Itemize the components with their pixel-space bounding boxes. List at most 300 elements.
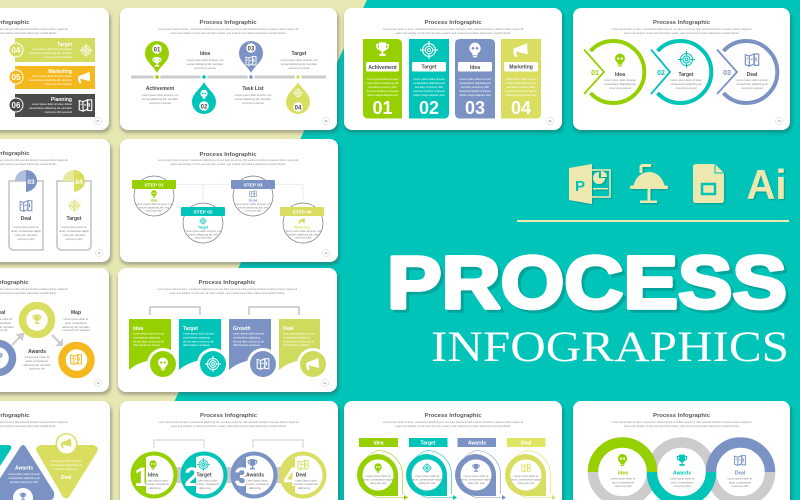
circle 3 awards: sit amet, consetetuer	[245, 482, 269, 486]
card: growth	[229, 319, 279, 380]
ring: deal: Lorem ipsum dolor sit	[728, 476, 753, 480]
card: idea: elit sed diam nonummy nib	[133, 340, 164, 344]
circle 4 deal: Deal	[296, 472, 307, 478]
step 01: Lorem ipsum dolor sit amet, con	[136, 202, 173, 206]
tag 03 deal: Deal	[21, 216, 32, 222]
step 01: nonummy nibh	[145, 208, 163, 212]
circle 2 target: 2	[184, 462, 200, 492]
ring: awards: amet, consectetuer	[671, 480, 693, 484]
label: map: Lorem ipsum dolor sit	[64, 317, 89, 321]
label: awards: nonummy nib.	[29, 366, 45, 370]
triangle: deal: Deal	[61, 475, 72, 481]
step 02: nonummy nibh	[194, 236, 212, 240]
heading: Process Infographic	[424, 20, 482, 26]
circle 03 deal	[717, 41, 777, 103]
circle 02 target: nonummy Loremet	[675, 86, 697, 90]
subtitle: Lorem ipsum dolor sit amet, consectetur adipiscing elit, sed diam nonummy nibh euismod tincidunt ut laoreet dolore magna ali	[158, 421, 299, 424]
tag 04 target	[57, 170, 91, 250]
ring: deal	[711, 442, 770, 500]
bar: marketing 05: consectetuer adipiscing elit, sed diam	[29, 78, 72, 82]
subtitle: Lorem ipsum dolor sit amet, consectetur adipiscing elit, sed diam nonummy nibh euismod tincidunt ut laoreet dolore magna ali	[383, 28, 523, 31]
subtitle	[0, 159, 68, 166]
triangle: awards: Awards	[15, 466, 33, 472]
triangle: deal	[36, 433, 98, 498]
label: task list: nonummy Loremet	[242, 101, 264, 105]
label: achivement: Achivement	[146, 86, 175, 92]
teardrop: deal: Deal	[521, 440, 532, 446]
ring: idea: amet, consectetuer	[612, 480, 634, 484]
teardrop: target: cising elit, sed	[419, 481, 436, 485]
card 04 marketing: 04	[511, 98, 531, 118]
card: target: nibh tincidunt ut laoreet	[183, 343, 210, 347]
icon: powerpoint	[569, 164, 610, 204]
circle 2 target: adipiscing	[199, 486, 211, 490]
page number: 09	[549, 120, 552, 123]
label: target	[281, 51, 318, 70]
step 02: Lorem ipsum dolor sit amet, con	[185, 229, 222, 233]
subtitle: quam erat volutpat. Ut wisi enim ad minim veniam, quis nostrud exerci tation ullamcorper suscipit lobortis	[624, 32, 740, 35]
slide 08: timeline pins	[120, 8, 339, 133]
label: idea	[187, 51, 224, 70]
ring: deal: nonummy nibh	[731, 484, 749, 488]
page number: 08	[325, 120, 328, 123]
icon: google slides	[693, 164, 724, 203]
circle 02 target: consectetuer adipiscing elit	[670, 82, 702, 86]
subtitle: quam erat volutpat. Ut wisi enim ad minim veniam, quis nostrud exerci tation ullamcorper suscipit lobortis	[170, 32, 286, 35]
teardrop: awards: Awards	[468, 440, 486, 446]
bar: planning 06: nonummy nibh euismod	[44, 110, 73, 114]
label: task list: Lorem ipsum dolor sit amet, con	[235, 93, 272, 97]
circle 03 deal: nonummy Loremet	[741, 86, 763, 90]
step 04: Lorem ipsum dolor sit amet, con	[285, 229, 322, 233]
label: map	[62, 310, 90, 332]
tag 03 deal: cising elit, sed diam	[15, 233, 37, 237]
subtitle: Lorem ipsum dolor sit amet, consectetur adipiscing elit, sed diam nonummy nibh euismod tincidunt ut laoreet dolore magna ali	[612, 421, 752, 424]
label: map: adipiscing elit, sed diam	[62, 325, 90, 329]
ring: idea: nonummy nibh	[614, 484, 632, 488]
tag 03 deal: Lorem ipsum dolor sit	[14, 225, 39, 229]
step 01: secuer adipiscing elit, sed	[139, 206, 169, 210]
step 03: Grow	[249, 198, 258, 202]
label: achivement	[142, 86, 179, 105]
label: task list: Task List	[242, 86, 264, 92]
circle 3 awards: 3	[234, 462, 250, 492]
card 04 marketing	[501, 39, 541, 118]
circle 1 idea: Lorem ipsum dolor	[146, 478, 168, 482]
card 02 target: Target	[422, 64, 437, 70]
card 03 idea: Idea	[470, 65, 480, 71]
tag 03 deal: nonummy nibh	[17, 237, 35, 241]
step 03: Lorem ipsum dolor sit amet, con	[235, 202, 272, 206]
page number: 14	[325, 252, 328, 255]
slide: numbered circles	[120, 401, 340, 500]
bar: target 04: consectetuer adipiscing elit, sed diam	[29, 51, 72, 55]
card: growth: Lorem ipsum dolor sit amet	[233, 332, 265, 336]
subtitle: quam erat volutpat. Ut wisi enim ad minim veniam, quis nostrud exerci tation ullamcorper suscipit lobortis	[624, 425, 740, 428]
card 01 achivement: consectetuer adipiscing elit	[367, 81, 398, 85]
page number: 19	[97, 382, 100, 385]
subtitle: quam erat volutpat. Ut wisi enim ad minim veniam, quis nostrud exerci tation ullamcorper suscipit lobortis	[170, 163, 286, 166]
label: awards	[23, 349, 51, 370]
slide 09: four cards	[344, 8, 564, 133]
pin 01: 01	[154, 48, 161, 54]
step 03: nonummy nibh	[244, 208, 262, 212]
circle 02 target: 02	[657, 70, 665, 77]
step 02: secuer adipiscing elit, sed	[188, 232, 218, 236]
heading: Process Infographic	[200, 152, 257, 158]
tag 03 deal: 03	[27, 179, 35, 186]
card: growth: elit sed diam nonummy nib	[233, 340, 264, 344]
ring: awards: Awards	[673, 470, 691, 476]
teardrop: target: Target	[421, 440, 436, 446]
card: deal: nibh tincidunt ut laoreet	[283, 343, 310, 347]
triangle: awards: Lorem ipsum dolor sit amet	[8, 472, 40, 476]
card 04 marketing: euismod tincidunt ut laoreet	[505, 89, 537, 93]
step 03: secuer adipiscing elit, sed	[238, 206, 268, 210]
teardrop: target: Lorem ipsum dolor sit	[415, 474, 440, 478]
heading: Process Infographic	[200, 20, 257, 26]
ring: blue	[0, 344, 12, 372]
circle 4 deal: sit amet, consetetuer	[294, 482, 318, 486]
teardrop: awards	[455, 438, 506, 500]
triangle: teal	[0, 445, 11, 466]
card 01 achivement: 01	[372, 98, 393, 118]
page number: 12	[98, 252, 101, 255]
subtitle: quam erat volutpat. Ut wisi enim ad minim veniam, quis nostrud exerci tation ullamcorper suscipit lobortis	[396, 425, 511, 428]
heading: Process Infographic	[424, 413, 482, 419]
teardrop: deal: cising elit, sed	[518, 481, 535, 485]
card 04 marketing: dolore magna aliquam erat	[506, 93, 537, 97]
card: growth: consectetuer adipiscing	[233, 336, 261, 340]
subtitle: quam erat volutpat. Ut wisi enim ad minim veniam, quis nostrud exerci tation ullamcorper suscipit lobortis	[170, 292, 285, 295]
teardrop: idea: Lorem ipsum dolor sit	[366, 474, 391, 478]
divider	[517, 220, 789, 222]
ring: awards: Lorem ipsum dolor sit	[670, 476, 695, 480]
circle 4 deal: Lorem ipsum dolor	[295, 478, 317, 482]
brackets	[150, 307, 299, 315]
ring: trophy	[22, 306, 52, 334]
card: growth: Growth	[233, 326, 250, 332]
circle 1 idea: adipiscing	[149, 486, 161, 490]
heading: Process Infographic	[198, 280, 256, 286]
bar: planning 06	[9, 94, 95, 117]
card 02 target: euismod tincidunt ut laoreet	[413, 89, 445, 93]
step 04: secuer adipiscing elit, sed	[288, 232, 318, 236]
card: deal: elit sed diam nonummy nib	[283, 340, 314, 344]
label: achivement: nonummy Loremet	[149, 101, 171, 105]
bar: planning 06: Planning	[51, 97, 72, 103]
subtitle	[383, 421, 523, 428]
icon: powerpoint: P	[575, 178, 585, 195]
slide: triangles (cropped)	[0, 401, 112, 500]
slide 13: paper tags (cropped)	[0, 139, 112, 265]
step 01: STEP 01	[144, 182, 164, 188]
circle 3 awards: adipiscing	[249, 486, 261, 490]
label: achivement: Lorem ipsum dolor sit amet, con	[142, 93, 179, 97]
label: map: nonummy nib. euismod	[63, 328, 90, 332]
page number: 07	[97, 120, 100, 123]
slide 10: chevron circles	[573, 8, 792, 133]
page number	[776, 118, 782, 124]
bar: planning 06: Lorem ipsum dolor sit amet, dolore	[32, 102, 73, 106]
circle 01 idea: 01	[591, 70, 599, 77]
teardrop: deal: amet, consectetuer adipis	[511, 478, 541, 482]
label: achivement: secuer adipiscing elit, sed diam	[142, 97, 178, 101]
card 04 marketing: sed diam nonummy nibh	[507, 85, 536, 89]
brackets	[154, 440, 303, 448]
card 01 achivement: Lorem ipsum dolor sit amet	[367, 77, 398, 81]
circle 03 deal: consectetuer adipiscing elit	[736, 82, 768, 86]
timeline line	[131, 76, 326, 78]
step 04: nonummy nibh	[294, 236, 312, 240]
label: idea: Lorem ipsum dolor sit amet, con	[187, 58, 224, 62]
subtitle: Lorem ipsum dolor sit amet, consectetur adipiscing elit, sed diam nonummy nibh euismod tincidunt ut laoreet dolore magna ali	[157, 288, 297, 291]
tag 04 target: Lorem ipsum dolor sit	[62, 225, 87, 229]
bar: target 04: 04	[12, 46, 21, 55]
circle 1 idea: 1	[134, 462, 150, 492]
label: target: Target	[292, 51, 307, 57]
bar: marketing 05	[9, 66, 95, 89]
card: target: consectetuer adipiscing	[183, 336, 211, 340]
teardrop: awards: Lorem ipsum dolor sit	[464, 474, 489, 478]
pin 04: 04	[295, 106, 302, 112]
circle 2 target: sit amet, consetetuer	[195, 482, 219, 486]
triangle: deal: sed diam nonummy	[55, 467, 78, 471]
subtitle	[383, 28, 523, 35]
step 03	[231, 176, 275, 216]
ring: deal: amet, consectetuer	[729, 480, 751, 484]
teardrop: idea	[357, 438, 408, 500]
card: target: Target	[183, 326, 198, 332]
circle 3 awards	[230, 452, 278, 498]
triangle: deal: consectetuer adipiscing elit	[50, 463, 82, 467]
step 01	[132, 176, 176, 216]
circle 4 deal	[280, 452, 326, 498]
subtitle	[158, 28, 298, 35]
label: awards: Lorem ipsum dolor sit	[25, 355, 50, 359]
triangle: awards: sed diam nonummy nibh	[10, 480, 39, 484]
card: deal: Lorem ipsum dolor sit amet	[283, 332, 315, 336]
step 02	[181, 203, 225, 243]
circle 1 idea: sit amet, consetetuer	[145, 482, 169, 486]
page number: 20	[324, 382, 327, 385]
pin 01	[145, 41, 169, 73]
triangle: awards	[0, 445, 54, 500]
card 01 achivement: euismod tincidunt ut laoreet	[367, 89, 399, 93]
connectors	[176, 184, 303, 200]
page number: 10	[778, 120, 781, 123]
ring: idea: Lorem ipsum dolor sit	[611, 476, 636, 480]
teardrop: awards: amet, consectetuer adipis	[461, 478, 491, 482]
label: idea: nonummy Loremet	[194, 66, 216, 70]
bar: marketing 05: 05	[12, 73, 21, 82]
icon: illustrator: Ai	[746, 161, 786, 208]
bar: marketing 05: Marketing	[48, 69, 72, 75]
card 03 idea: consectetuer adipiscing elit	[459, 81, 491, 85]
card 02 target: sed diam nonummy nibh	[415, 85, 444, 89]
pin 04	[286, 82, 310, 114]
card: target	[179, 319, 229, 380]
circle 01 idea: Lorem ipsum dolor sit amet	[604, 78, 636, 82]
circle 01 idea: consectetuer adipiscing elit	[604, 82, 636, 86]
circle 01 idea	[584, 41, 644, 103]
label: deal	[0, 310, 14, 332]
tag 04 target: Target	[67, 216, 82, 222]
bar: target 04: Target	[57, 42, 72, 48]
label: map: Map	[71, 310, 81, 316]
page number	[94, 118, 102, 124]
slide 07: stacked bars (cropped)	[0, 8, 111, 133]
card: idea: consectetuer adipiscing	[133, 336, 161, 340]
teardrop: idea: cising elit, sed	[370, 481, 387, 485]
ring: deal: Deal	[735, 470, 746, 476]
subtitle: Lorem ipsum dolor sit amet, consectetur adipiscing elit, sed diam nonummy nibh euismod tincidunt ut laoreet dolore magna ali	[158, 28, 298, 31]
software icons	[569, 161, 786, 208]
circle 03 deal: 03	[723, 70, 731, 77]
card: deal	[279, 319, 329, 380]
card 01 achivement: sed diam nonummy nibh	[368, 85, 397, 89]
subtitle	[612, 421, 752, 428]
circle 2 target: Lorem ipsum dolor	[196, 478, 218, 482]
teardrop: deal	[505, 438, 556, 500]
card: deal: consectetuer adipiscing	[283, 336, 311, 340]
label: awards: amet, consectetuer	[26, 359, 48, 363]
card 02 target: 02	[419, 98, 439, 118]
bar: target 04	[9, 38, 95, 62]
circle 02 target: Lorem ipsum dolor sit amet	[670, 78, 702, 82]
page number	[322, 380, 328, 386]
bar: planning 06: consectetuer adipiscing elit, sed diam	[29, 106, 72, 110]
tag 04 target: nonummy nibh	[65, 237, 83, 241]
bar: target 04: nonummy nibh euismod	[44, 55, 73, 59]
tag 04 target: amet, consectetuer adipis	[59, 229, 89, 233]
subtitle: quam erat volutpat. Ut wisi enim ad minim veniam, quis nostrud exerci tation ullamcorper suscipit lobortis	[396, 32, 511, 35]
pin 03	[239, 41, 263, 73]
card 04 marketing: Marketing	[509, 64, 533, 70]
bar: marketing 05: nonummy nibh euismod	[44, 82, 73, 86]
card 02 target: dolore magna aliquam erat	[414, 93, 445, 97]
card: growth: nibh tincidunt ut laoreet	[233, 343, 260, 347]
page number	[322, 118, 330, 124]
card 03 idea: dolore magna aliquam erat	[460, 93, 491, 97]
label: target: Lorem ipsum dolor sit amet, con	[281, 58, 318, 62]
ring: awards: nonummy nibh	[673, 484, 691, 488]
pin 02: 02	[201, 104, 208, 110]
step 02: Target	[198, 226, 209, 230]
bar: target 04: Lorem ipsum dolor sit amet, dolore	[32, 47, 73, 51]
tag 04 target: 04	[75, 179, 83, 186]
band	[170, 467, 300, 483]
subtitle: quam erat volutpat. Ut wisi enim ad minim veniam, quis nostrud exerci tation ullamcorper suscipit lobortis	[171, 425, 287, 428]
subtitle	[157, 288, 297, 295]
tag 03 deal: amet, consectetuer adipis	[11, 229, 41, 233]
card 02 target: consectetuer adipiscing elit	[413, 81, 445, 85]
label: target: secuer adipiscing elit, sed diam	[281, 62, 317, 66]
card 01 achivement	[363, 39, 402, 118]
circle 03 deal: Lorem ipsum dolor sit amet	[736, 78, 768, 82]
teardrop: awards: cising elit, sed	[468, 481, 485, 485]
circle 03 deal: Deal	[747, 72, 758, 78]
teardrop: target: amet, consectetuer adipis	[412, 478, 442, 482]
card 02 target	[409, 39, 449, 118]
pin 02	[192, 82, 216, 114]
slide: interlocked rings	[573, 401, 792, 500]
label: awards: Awards	[28, 349, 46, 355]
ring: idea: Idea	[618, 470, 628, 476]
teardrop: idea: amet, consectetuer adipis	[363, 478, 393, 482]
circle 3 awards: Awards	[246, 472, 264, 478]
label: target: nonummy Loremet	[288, 66, 310, 70]
card 01 achivement: Achivement	[368, 65, 397, 71]
circle 2 target	[180, 452, 228, 498]
heading: Process Infographic	[653, 20, 711, 26]
subtitle	[612, 28, 752, 35]
subtitle	[0, 421, 68, 428]
ring: map	[62, 346, 91, 374]
page number	[322, 250, 330, 256]
headline: PROCESS: PROCESS	[387, 241, 787, 324]
heading: Process Infographic	[653, 413, 711, 419]
label: map: amet, consectetuer	[65, 321, 87, 325]
slide 14: step circles	[120, 139, 340, 265]
label: task list: secuer adipiscing elit, sed diam	[235, 97, 271, 101]
page number	[546, 118, 554, 124]
card 04 marketing: Lorem ipsum dolor sit amet	[505, 77, 537, 81]
circle 1 idea: Idea	[148, 472, 158, 478]
circle 4 deal: adipiscing	[298, 486, 310, 490]
circle 01 idea: Idea	[615, 72, 625, 78]
subtitle	[0, 288, 68, 295]
subheadline: INFOGRAPHICS: INFOGRAPHICS	[431, 324, 789, 371]
ring: awards	[652, 455, 711, 500]
card 04 marketing: consectetuer adipiscing elit	[505, 81, 537, 85]
step 02: STEP 02	[193, 210, 213, 216]
teardrop: target	[406, 438, 457, 500]
subtitle	[0, 28, 68, 35]
label: idea: Idea	[200, 51, 210, 57]
timeline dots	[154, 74, 302, 80]
circle 02 target	[651, 41, 711, 103]
card 03 idea: sed diam nonummy nibh	[461, 85, 490, 89]
step 03: STEP 03	[243, 182, 263, 188]
slide: teardrop rings	[344, 401, 564, 500]
circle 1 idea	[130, 452, 178, 498]
page number	[96, 250, 102, 256]
page number	[94, 380, 102, 386]
subtitle	[158, 159, 298, 166]
circle 4 deal: 4	[283, 462, 299, 492]
card: idea: nibh tincidunt ut laoreet	[133, 343, 160, 347]
bar: planning 06: 06	[12, 101, 21, 110]
card: deal: Deal	[283, 326, 294, 332]
circle 2 target: Target	[197, 472, 212, 478]
pin 03: 03	[248, 46, 255, 52]
card: target: elit sed diam nonummy nib	[183, 340, 214, 344]
slide 20: flag cards	[118, 268, 339, 395]
card 03 idea	[455, 39, 495, 118]
ring: middle grey arc	[652, 442, 711, 472]
subtitle: Lorem ipsum dolor sit amet, consectetur adipiscing elit, sed diam nonummy nibh euismod tincidunt ut laoreet dolore magna ali	[612, 28, 752, 31]
label: awards: adipiscing elit, sed diam	[23, 363, 51, 367]
card 03 idea: 03	[465, 98, 485, 118]
subtitle: Lorem ipsum dolor sit amet, consectetur adipiscing elit, sed diam nonummy nibh euismod tincidunt ut laoreet dolore magna ali	[383, 421, 523, 424]
ring: idea	[593, 442, 652, 500]
teardrop: idea: Idea	[373, 440, 384, 446]
card 03 idea: Lorem ipsum dolor sit amet	[459, 77, 491, 81]
card: target: Lorem ipsum dolor sit amet	[183, 332, 215, 336]
circle 02 target: Target	[679, 72, 694, 78]
step 04	[280, 203, 324, 243]
